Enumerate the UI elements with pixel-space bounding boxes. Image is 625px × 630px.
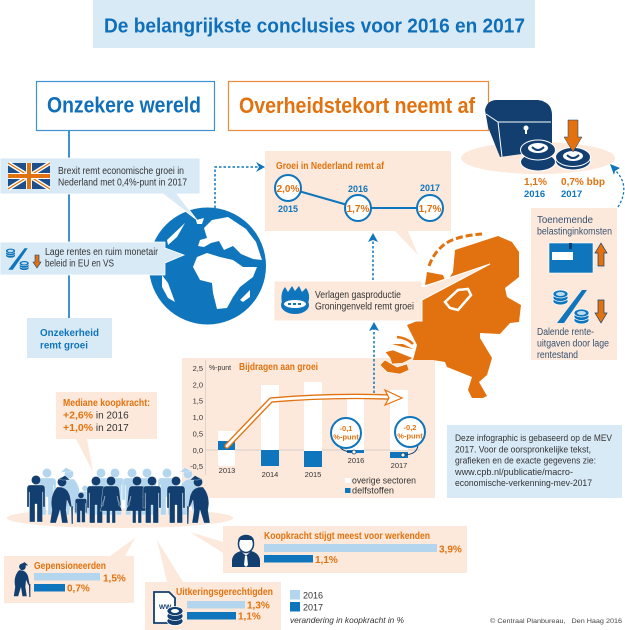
panel: Onzekerheid remt groei: Onzekerheid <box>40 327 99 339</box>
legend: koopkracht: 2017 <box>303 602 323 612</box>
line chart: growth: 2015 <box>278 204 298 214</box>
bars: Gepensioneerden: 1,5% <box>103 574 126 584</box>
arrow: right panel to chest <box>610 164 624 207</box>
x axis labels: 2014 <box>262 470 278 479</box>
panel: tax income and interest <box>531 208 617 361</box>
x axis labels: 2013 <box>219 466 235 475</box>
icon: gas flame burner <box>281 286 309 314</box>
callout: -0,2 %-punt <box>395 417 425 457</box>
panel: Onzekerheid remt groei <box>27 318 112 358</box>
text: deficit figures <box>524 176 605 200</box>
panel: Brexit <box>0 158 200 220</box>
callout: -0,1 %-punt <box>331 418 361 454</box>
y axis: 2,0 <box>193 380 203 390</box>
y axis <box>190 364 203 471</box>
icon: percent and coins <box>6 248 29 270</box>
panel: Mediane koopkracht: +1,0% in 2017 <box>63 422 129 434</box>
x axis labels: 2015 <box>305 470 321 479</box>
text block: source note: grafieken en de exacte gegevens zie: <box>455 456 596 466</box>
arrow: gas panel up to growth panel <box>368 233 378 280</box>
callout: -0,1 %-punt: %-punt <box>333 432 359 442</box>
bars: Uitkeringsgerechtigden: 1,1% <box>238 612 261 622</box>
icon: man in suit <box>232 535 260 567</box>
panel: bar chart Bijdragen aan groei: %-punt <box>209 365 231 372</box>
y axis: 1,0 <box>193 413 203 422</box>
icon: arrow up <box>595 243 607 266</box>
bars: overige sectoren <box>218 382 408 467</box>
y axis: 1,5 <box>193 396 203 406</box>
y axis: 2,5 <box>193 364 203 373</box>
icon: orange arrow into coins <box>564 120 582 152</box>
panel: Gepensioneerden: Gepensioneerden <box>34 561 106 572</box>
legend: delfstoffen <box>352 486 394 496</box>
text block: source note: economische-verkenning-mev-2017 <box>455 478 592 489</box>
text: deficit figures: 1,1% <box>524 176 548 188</box>
text: Dalende rente-uitgaven: rentestand <box>537 350 578 361</box>
icon: arrow down <box>595 300 607 323</box>
icon: percent and coins <box>553 290 589 324</box>
panel: Koopkracht stijgt meest voor werkenden <box>190 526 467 573</box>
line chart: growth: 2016 <box>348 184 368 194</box>
legend: koopkracht: 2016 <box>303 590 323 600</box>
text: Toenemende belastinginkomsten: Toenemende <box>537 215 593 226</box>
icon: treasure chest with coins <box>461 100 615 174</box>
title: De belangrijkste conclusies voor 2016 en 2017 <box>104 16 525 38</box>
text block: source note: www.cpb.nl/publicatie/macro- <box>454 467 573 478</box>
text: deficit figures: 0,7% bbp <box>561 176 605 188</box>
panel: Groei in Nederland remt af: Groei in Nederland remt af <box>276 161 385 172</box>
bars: werkenden: 3,9% <box>439 544 462 556</box>
connector line: onzekere wereld <box>68 130 70 318</box>
copyright: © Centraal Planbureau, Den Haag 2016 <box>490 617 622 625</box>
panel: bar chart Bijdragen aan groei <box>182 358 435 498</box>
bars: Gepensioneerden: 0,7% <box>67 584 90 594</box>
heading: Onzekere wereld: Onzekere wereld <box>47 92 201 118</box>
text: lage rentes: Lage rentes en ruim monetair <box>45 247 159 258</box>
legend: koopkracht: verandering in koopkracht in % <box>290 615 404 625</box>
line chart: growth: 2,0% <box>277 184 300 195</box>
text: Brexit: Brexit remt economische groei in <box>58 166 184 177</box>
icon: globe <box>149 208 266 324</box>
y axis: 0,5 <box>193 430 203 438</box>
x axis labels: 2017 <box>391 461 407 470</box>
panel: Mediane koopkracht <box>56 392 157 472</box>
icon: elderly person <box>14 562 30 597</box>
line chart: growth: 1,7% <box>419 204 442 215</box>
text: Toenemende belastinginkomsten: belastinginkomsten <box>537 226 612 238</box>
bars: Gepensioneerden <box>34 573 126 594</box>
people in foreground <box>27 475 210 524</box>
legend: koopkracht <box>290 590 404 625</box>
text: gasproductie: Verlagen gasproductie <box>315 290 401 301</box>
panel: Groei in Nederland remt af <box>265 151 451 255</box>
panel: Koopkracht stijgt meest voor werkenden: Koopkracht stijgt meest voor werkenden <box>264 531 430 542</box>
text: Dalende rente-uitgaven: Dalende rente- <box>537 327 594 338</box>
icon: WW document and coins: WW <box>159 604 172 611</box>
arrow: globe to growth panel <box>215 162 265 208</box>
line chart: growth: 2017 <box>420 183 440 193</box>
heading: Overheidstekort neemt af: Overheidstekort neemt af <box>239 93 476 118</box>
panel: Onzekerheid remt groei: remt groei <box>40 340 88 352</box>
legend: overige sectoren <box>352 476 416 486</box>
line chart: growth: 1,7% <box>347 204 370 215</box>
callout: -0,2 %-punt: -0,2 <box>404 423 416 432</box>
icon: envelope <box>549 243 593 273</box>
panel: Uitkeringsgerechtigden <box>145 540 281 630</box>
arrow: growth trend in chart <box>227 390 402 446</box>
y axis: -0,5 <box>190 462 203 471</box>
x axis labels: 2016 <box>348 456 364 465</box>
panel: Gepensioneerden <box>4 538 135 603</box>
panel: Mediane koopkracht: +2,6% in 2016 <box>63 410 129 422</box>
people in background <box>38 468 200 516</box>
panel: Verlagen gasproductie <box>274 264 490 321</box>
bars: Uitkeringsgerechtigden <box>187 600 270 622</box>
icon: British flag <box>8 163 50 189</box>
panel: Mediane koopkracht: Mediane koopkracht: <box>63 398 150 409</box>
arrow: chart up to gas panel <box>369 322 379 393</box>
y axis: 0,0 <box>193 446 203 455</box>
callout: -0,1 %-punt: -0,1 <box>340 424 352 433</box>
icon: orange arrow down <box>33 255 41 268</box>
title <box>93 0 535 48</box>
legend <box>345 476 416 496</box>
icon: Netherlands map <box>380 234 521 398</box>
text: lage rentes: beleid in EU en VS <box>45 258 114 270</box>
panel: Uitkeringsgerechtigden: Uitkeringsgerechtigden <box>176 587 273 598</box>
bars: werkenden <box>264 544 462 566</box>
illustration: crowd of people <box>7 468 233 528</box>
bars: werkenden: 1,1% <box>315 555 338 566</box>
bars: delfstoffen <box>218 441 408 467</box>
line chart: growth <box>275 175 443 221</box>
text block: source note <box>447 425 622 498</box>
text: Dalende rente-uitgaven: uitgaven door lage <box>537 338 609 350</box>
bars: Uitkeringsgerechtigden: 1,3% <box>247 600 270 612</box>
text: gasproductie: Groningenveld remt groei <box>315 302 414 312</box>
text: deficit figures: 2016 <box>524 189 545 200</box>
text: deficit figures: 2017 <box>561 189 582 200</box>
chart title: Bijdragen aan groei <box>239 362 318 373</box>
text block: source note: 2017. Voor de oorspronkelijke tekst, <box>455 444 591 456</box>
x axis labels <box>219 456 407 479</box>
text: Brexit: Nederland met 0,4%-punt in 2017 <box>58 178 187 188</box>
panel: lage rentes <box>0 242 184 275</box>
heading: Onzekere wereld <box>36 82 214 130</box>
callout: -0,2 %-punt: %-punt <box>397 432 423 440</box>
heading: Overheidstekort neemt af <box>228 82 488 130</box>
